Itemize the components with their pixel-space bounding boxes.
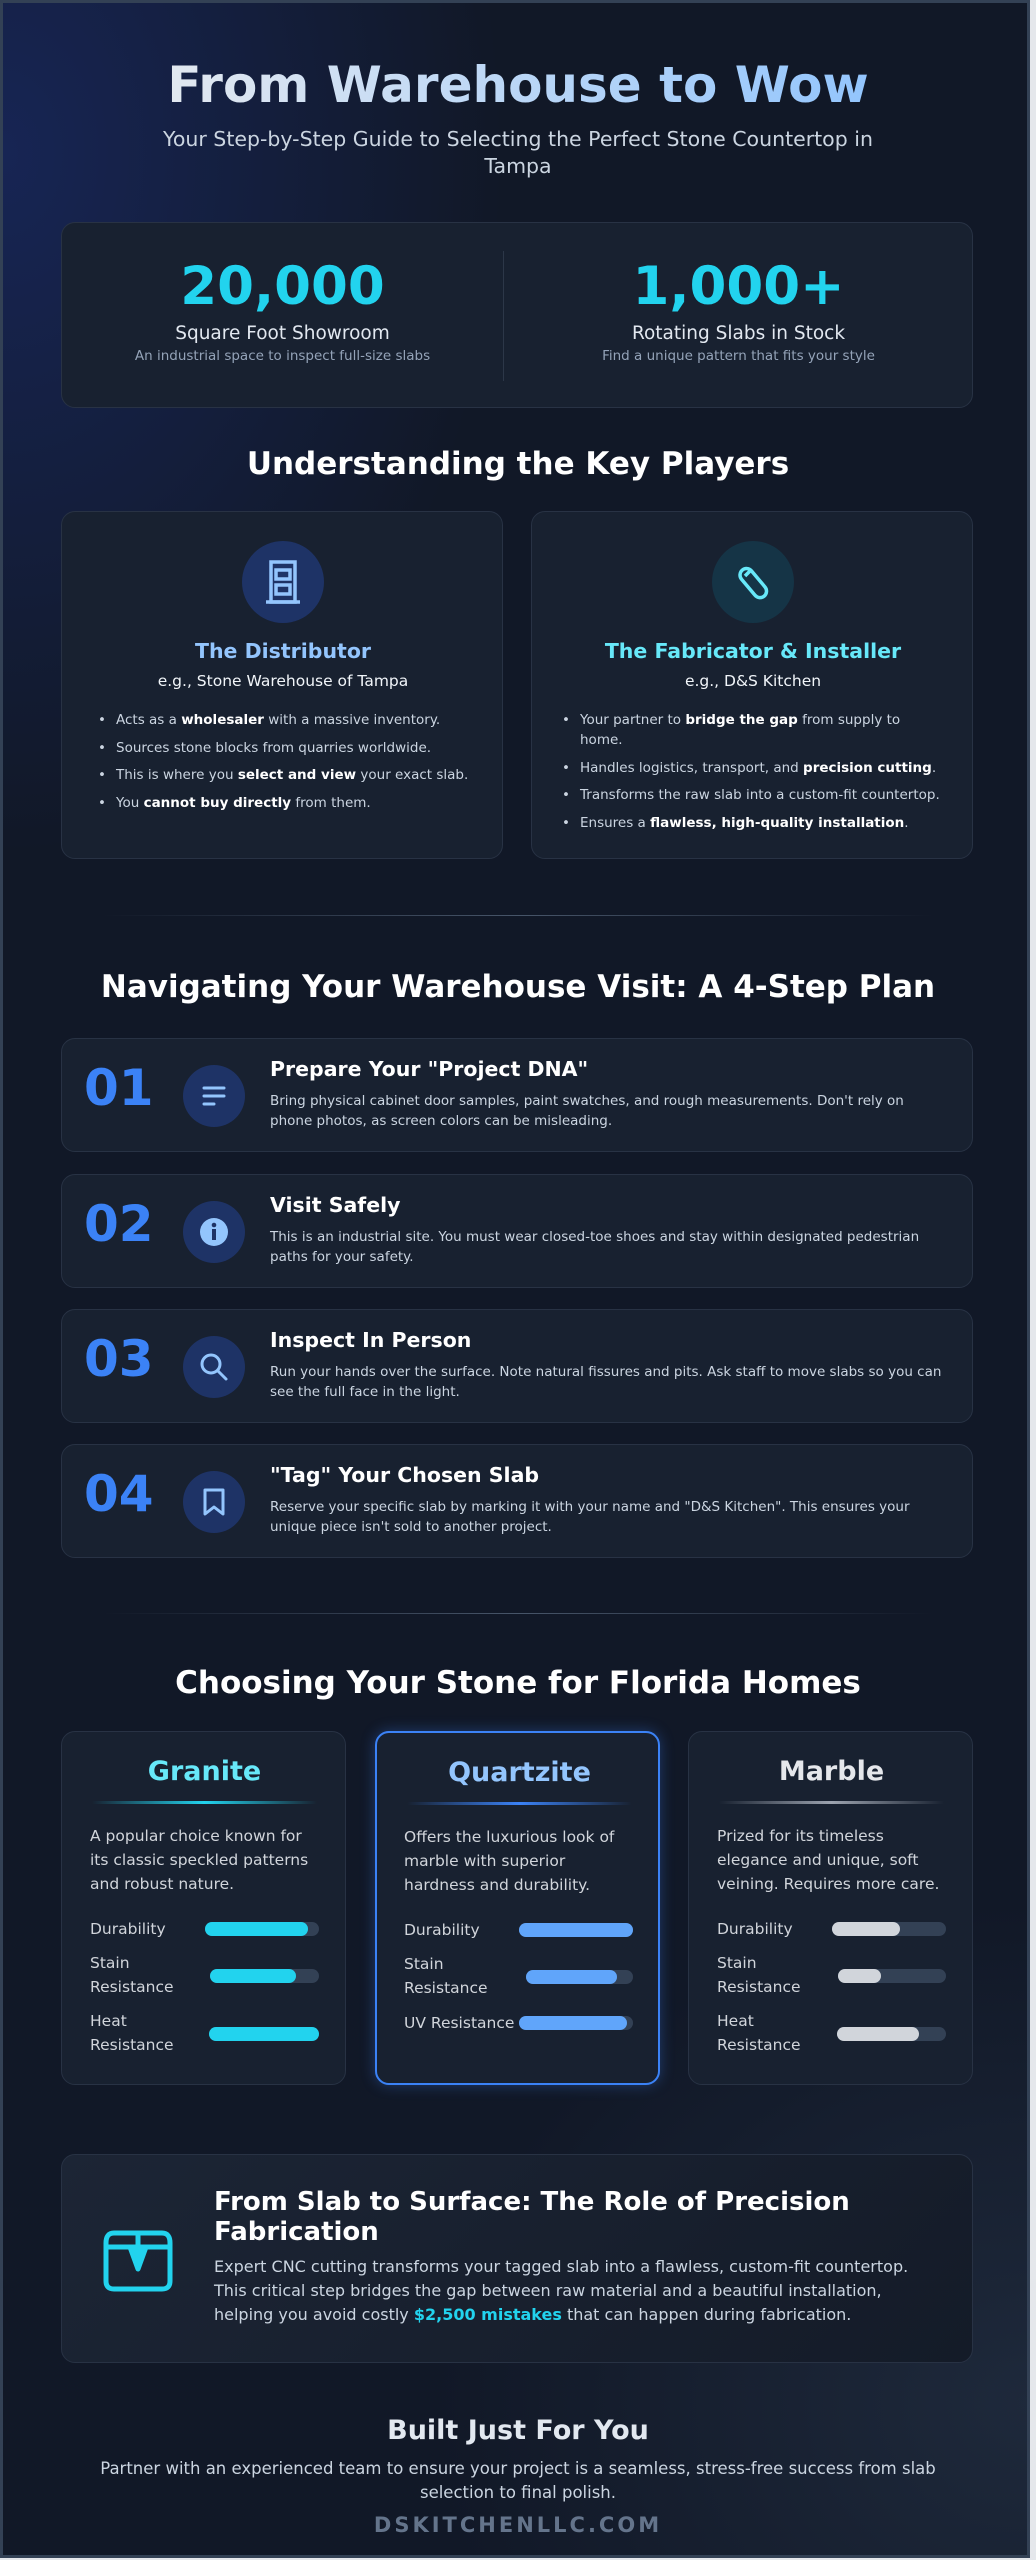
panel: distributor [61, 511, 503, 859]
panel: fabricator [531, 511, 973, 859]
bars: Durability [90, 1920, 166, 1938]
heading: key players: Understanding the Key Players [247, 446, 789, 482]
panel: fabricator: e.g., D&S Kitchen [685, 672, 821, 690]
panel: precision fabrication: Expert CNC cutting transforms your tagged slab into a flawless, custom-fit countertop. This critical step bridges the gap between raw material and a beautiful installation, helping you avoid costly $2,500 mistakes that can happen during fabrication. [214, 2257, 908, 2324]
step 4: "Tag" Your Chosen Slab [270, 1463, 539, 1487]
icon: bookmark [183, 1471, 245, 1533]
step 2: 02 [84, 1195, 154, 1253]
heading: choosing stone: Choosing Your Stone for Florida Homes [175, 1665, 861, 1701]
stat: slabs: 1,000+ [632, 256, 845, 317]
panel: marble [688, 1731, 973, 2085]
panel: quartzite: Offers the luxurious look of marble with superior hardness and durability. [404, 1828, 614, 1894]
icon: shelving [242, 541, 324, 623]
panel: granite: Heat Resistance [90, 2012, 174, 2054]
panel: marble: Heat Resistance [717, 2012, 801, 2054]
panel: distributor: e.g., Stone Warehouse of Tampa [158, 672, 408, 690]
title: From Warehouse to Wow [167, 56, 869, 114]
bullets: You cannot buy directly from them. [116, 794, 371, 810]
step 2: Visit Safely [270, 1193, 401, 1217]
panel: marble: Stain Resistance [717, 1954, 801, 1996]
panel: granite: Stain Resistance [90, 1954, 174, 1996]
icon: info [183, 1201, 245, 1263]
panel: stats [61, 222, 973, 408]
step 3: 03 [84, 1330, 154, 1388]
panel: precision fabrication: From Slab to Surface: The Role of Precision Fabrication [214, 2187, 850, 2247]
bullets [564, 712, 940, 830]
subtitle: Your Step-by-Step Guide to Selecting the Perfect Stone Countertop in Tampa [163, 127, 873, 178]
step 3: Run your hands over the surface. Note natural fissures and pits. Ask staff to move slabs so you can see the full face in the light. [270, 1364, 941, 1400]
footer url: DSKITCHENLLC.COM [374, 2513, 662, 2537]
bullets [100, 712, 468, 810]
stat: showroom [135, 256, 430, 364]
panel: marble: Marble [779, 1756, 884, 1787]
footer text: Partner with an experienced team to ensure your project is a seamless, stress-free success from slab selection to final polish. [100, 2459, 936, 2502]
step 4: Reserve your specific slab by marking it with your name and "D&S Kitchen". This ensures your unique piece isn't sold to another project. [270, 1499, 910, 1535]
step 3: Inspect In Person [270, 1328, 471, 1352]
step 1 [61, 1038, 973, 1152]
panel: quartzite: Durability [404, 1921, 480, 1939]
panel: granite: A popular choice known for its classic speckled patterns and robust nature. [90, 1827, 308, 1893]
step 1: Prepare Your "Project DNA" [270, 1057, 588, 1081]
icon: search [183, 1336, 245, 1398]
stat: slabs: Find a unique pattern that fits your style [602, 348, 875, 364]
icon: wrench [712, 541, 794, 623]
heading: 4-step plan: Navigating Your Warehouse Visit: A 4-Step Plan [101, 969, 935, 1005]
stat: slabs: Rotating Slabs in Stock [632, 323, 845, 344]
panel: granite [61, 1731, 346, 2085]
bullets: Sources stone blocks from quarries worldwide. [116, 740, 431, 756]
panel: quartzite: Quartzite [448, 1757, 591, 1788]
title: The Fabricator & Installer [605, 639, 901, 663]
step 3 [61, 1309, 973, 1423]
panel: quartzite: UV Resistance [404, 2014, 514, 2032]
stat: slabs [602, 256, 875, 364]
step 1: Bring physical cabinet door samples, paint swatches, and rough measurements. Don't rely on phone photos, as screen colors can be misleading. [270, 1093, 904, 1129]
panel: granite: Granite [148, 1756, 261, 1787]
bullets: This is where you select and view your exact slab. [116, 767, 468, 783]
step 4: 04 [84, 1465, 154, 1523]
bullets: home. [580, 732, 623, 748]
panel: quartzite [375, 1731, 660, 2085]
panel: marble: Durability [717, 1920, 793, 1938]
stat: showroom: An industrial space to inspect full-size slabs [135, 348, 430, 364]
stat: showroom: 20,000 [180, 256, 385, 317]
step 2: This is an industrial site. You must wear closed-toe shoes and stay within designated pedestrian paths for your safety. [270, 1229, 919, 1265]
step 2 [61, 1174, 973, 1288]
panel: marble: Prized for its timeless elegance and unique, soft veining. Requires more care. [717, 1827, 939, 1893]
icon: cnc [104, 2230, 172, 2292]
bullets: Handles logistics, transport, and precision cutting. [580, 760, 936, 776]
step 4 [61, 1444, 973, 1558]
bullets: Acts as a wholesaler with a massive inventory. [116, 712, 440, 728]
step 1: 01 [84, 1059, 154, 1117]
bullets: Transforms the raw slab into a custom-fit countertop. [580, 787, 940, 803]
bullets: Your partner to bridge the gap from supply to [580, 712, 900, 728]
panel: quartzite: Stain Resistance [404, 1955, 488, 1997]
stat: showroom: Square Foot Showroom [175, 323, 390, 344]
bullets: Ensures a flawless, high-quality installation. [580, 814, 909, 830]
title: The Distributor [195, 639, 371, 663]
panel: precision fabrication [61, 2154, 973, 2363]
footer heading: Built Just For You [387, 2415, 649, 2446]
icon: lines [183, 1065, 245, 1127]
